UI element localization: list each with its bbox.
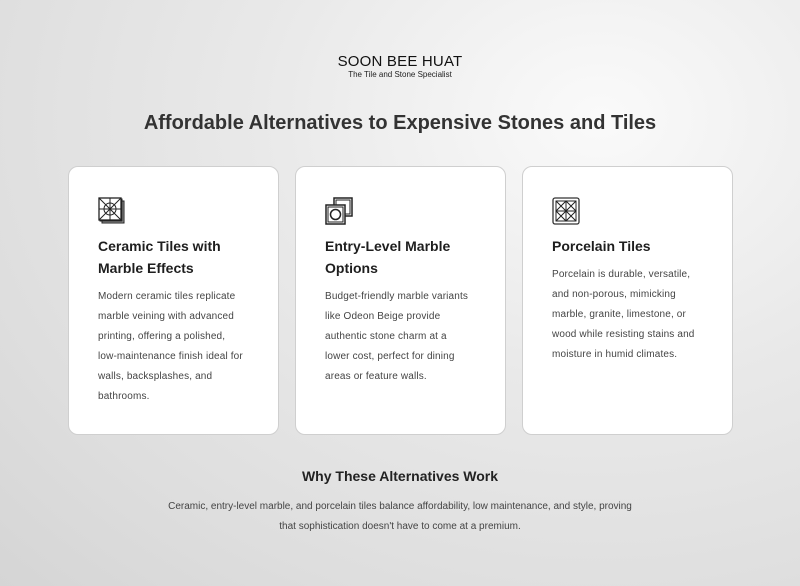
panel: porcelain: Porcelain is durable, versatile, xyxy=(552,269,690,280)
summary text xyxy=(168,501,632,532)
panel: marble: lower cost, perfect for dining xyxy=(325,351,455,362)
summary text: Ceramic, entry-level marble, and porcelain tiles balance affordability, low maintenance, and style, proving xyxy=(168,501,632,512)
panel: porcelain: and non-porous, mimicking xyxy=(552,289,676,300)
panel: ceramic: Ceramic Tiles with Marble Effects xyxy=(98,238,221,276)
panel: porcelain: moisture in humid climates. xyxy=(552,349,677,360)
panel: ceramic: walls, backsplashes, and xyxy=(98,371,212,382)
panel: ceramic: bathrooms. xyxy=(98,391,150,402)
summary text: that sophistication doesn't have to come at a premium. xyxy=(279,521,521,532)
panel: ceramic: low-maintenance finish ideal for xyxy=(98,351,243,362)
panel: ceramic: printing, offering a polished, xyxy=(98,331,225,342)
panel: marble: Entry-Level Marble Options xyxy=(325,238,450,276)
panel: porcelain: marble, granite, limestone, or xyxy=(552,309,686,320)
icon: porcelain tile xyxy=(552,197,580,225)
panel: ceramic: Modern ceramic tiles replicate xyxy=(98,291,235,302)
logo: The Tile and Stone Specialist xyxy=(348,70,452,79)
subheading: Why These Alternatives Work xyxy=(302,468,498,484)
panel: porcelain xyxy=(522,166,733,435)
panel: marble: areas or feature walls. xyxy=(325,371,427,382)
panel: ceramic: marble veining with advanced xyxy=(98,311,234,322)
panel: porcelain: wood while resisting stains and xyxy=(552,329,695,340)
icon: marble tiles xyxy=(325,197,353,225)
panel: marble: like Odeon Beige provide xyxy=(325,311,440,322)
icon: ceramic tile xyxy=(98,197,124,224)
logo xyxy=(338,53,462,79)
panel: marble: Budget-friendly marble variants xyxy=(325,291,468,302)
logo: SOON BEE HUAT xyxy=(338,53,462,70)
title: Affordable Alternatives to Expensive Stones and Tiles xyxy=(144,112,656,134)
panel: porcelain: Porcelain Tiles xyxy=(552,238,651,254)
panel: ceramic xyxy=(68,166,279,435)
panel: marble xyxy=(295,166,506,435)
panel: marble: authentic stone charm at a xyxy=(325,331,447,342)
